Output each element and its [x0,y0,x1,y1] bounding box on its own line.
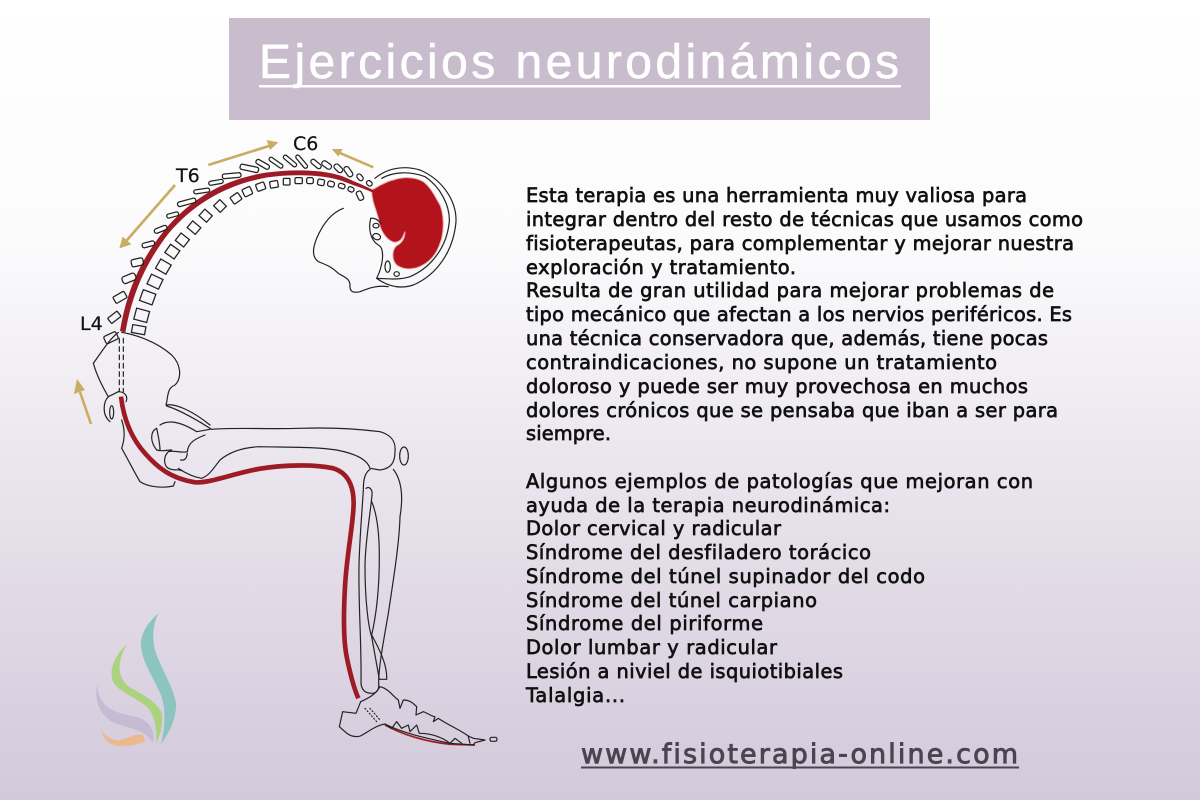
title banner: Ejercicios neurodinámicos [259,36,899,89]
label: T6: T6 [175,165,200,187]
tibia and fibula outline [359,469,402,693]
text block: pathologies list: Algunos ejemplos de patologías que mejoran con [526,470,1033,493]
text block: pathologies list: Dolor lumbar y radicular [526,636,777,659]
arrow: C6 left [332,149,373,167]
text block: description: dolores crónicos que se pensaba que iban a ser para [526,399,1058,422]
teal flame [141,613,176,744]
vertebral spinous processes [103,154,373,344]
text block: pathologies list: Síndrome del desfiladero torácico [526,541,871,564]
text block: description: una técnica conservadora que, además, tiene pocas [526,327,1048,350]
text block: description [526,184,1083,445]
hip and femur outline [122,406,408,487]
green flame [112,643,162,743]
text block: pathologies list: Síndrome del túnel carpiano [526,589,817,612]
vertebral bodies [131,178,364,335]
arrow: T6 down [119,185,175,248]
arrow: C6 right [208,140,278,165]
text block: pathologies list: Dolor cervical y radicular [526,517,781,540]
text block: description: tipo mecánico que afectan a los nervios periféricos. Es [526,303,1072,326]
skull outline [313,168,456,292]
text block: pathologies list: ayuda de la terapia neurodinámica: [526,494,890,517]
text block: pathologies list: Lesión a niviel de isquiotibiales [526,660,843,683]
text block: pathologies list: Síndrome del túnel supinador del codo [526,565,925,588]
text block: description: integrar dentro del resto de técnicas que usamos como [526,208,1083,231]
brain [372,178,443,269]
spinal cord [120,170,374,332]
pelvis outline [93,332,210,425]
text block: description: exploración y tratamiento. [526,256,796,279]
label: C6: C6 [293,133,318,155]
foot outline [339,687,497,745]
text block: pathologies list: Talalgia... [525,684,625,707]
plantar nerve [385,725,475,745]
arrow: lumbar up [74,379,91,424]
logo: coloured flames [96,613,176,746]
label: L4: L4 [80,313,103,335]
text block: description: fisioterapeutas, para complementar y mejorar nuestra [526,232,1074,255]
illustration: leg and sciatic nerve [121,397,497,745]
text block: description: siempre. [526,422,611,445]
orange flame [102,731,145,746]
text block: description: Esta terapia es una herramienta muy valiosa para [526,184,1027,207]
text block: description: contraindicaciones, no supone un tratamiento [526,351,997,374]
lavender flame [96,685,154,743]
text block: pathologies list [525,470,1033,707]
website link: www.fisioterapia-online.com [581,739,1018,770]
text block: pathologies list: Síndrome del piriforme [526,612,763,635]
title banner [229,18,930,120]
text block: description: doloroso y puede ser muy provechosa en muchos [526,375,1028,398]
sciatic nerve [121,397,358,698]
text block: description: Resulta de gran utilidad para mejorar problemas de [526,279,1054,302]
illustration: upper body, spine and head [93,140,456,425]
